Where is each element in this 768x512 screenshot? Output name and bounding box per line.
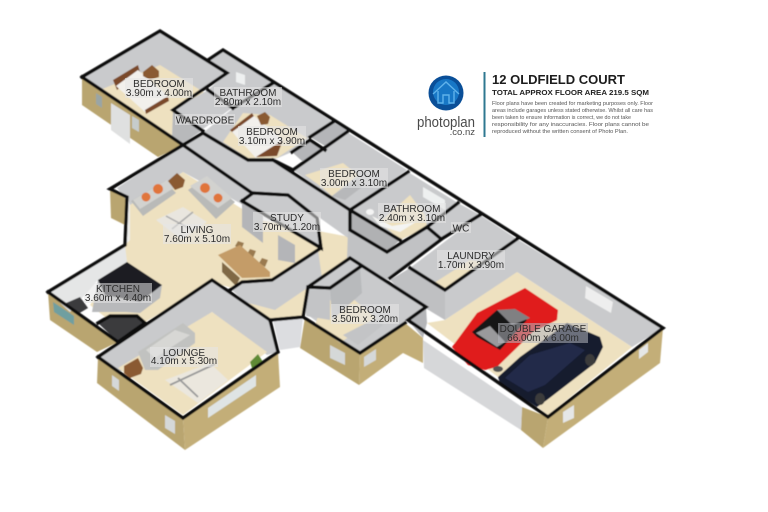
label: bathroom 2.80m x 2.10m: BATHROOM [219,88,277,99]
disclaimer text: reproduced without the written consent of Photo Plan. [492,129,628,135]
label: kitchen 3.60m x 4.40m: 3.60m x 4.40m [85,293,151,304]
study [242,193,320,263]
label: living 7.60m x 5.10m: 7.60m x 5.10m [164,234,230,245]
corridor walls [183,133,350,238]
icon: house in blue circle [428,76,464,110]
logo: photoplan [417,76,475,138]
label: bedroom 3.00m x 3.10m [320,168,388,189]
label: study 3.70m x 1.20m: 3.70m x 1.20m [254,222,320,233]
room: laundry and garage inner walls [390,215,518,320]
label: double garage 66.00m x 6.00m: 66.00m x 6.00m [507,333,579,344]
label: bedroom 3.00m x 3.10m: BEDROOM [328,169,380,180]
label: bathroom 2.80m x 2.10m: 2.80m x 2.10m [215,97,281,108]
label: bedroom 3.10m x 3.90m: BEDROOM [246,127,298,138]
disclaimer text: responsibility for any inaccuracies. Floor plans cannot be [492,122,649,128]
disclaimer text [492,101,653,135]
main floors [90,172,350,325]
label: bedroom 3.50m x 3.20m [331,304,399,325]
exterior brick walls [48,77,663,450]
label: WC: WC [453,224,469,234]
label: double garage 66.00m x 6.00m [498,323,588,344]
label: bedroom 3.90m x 4.00m: 3.90m x 4.00m [126,88,192,99]
label: bathroom 2.40m x 3.10m: 2.40m x 3.10m [379,213,445,224]
label: bathroom 2.40m x 3.10m [378,203,446,224]
logo domain: .co.nz [450,127,475,138]
label: bedroom 3.50m x 3.20m: 3.50m x 3.20m [332,314,398,325]
room: living walls [117,145,322,310]
icon: dark blue car [498,323,603,407]
label: living 7.60m x 5.10m [163,224,231,245]
label: bathroom 2.40m x 3.10m: BATHROOM [383,204,441,215]
label: double garage 66.00m x 6.00m: DOUBLE GARAGE [500,324,587,335]
dining table [218,241,270,286]
label: bathroom 2.80m x 2.10m [214,87,282,108]
disclaimer text: Floor plans have been created for marketing purposes only. Floor [492,101,653,107]
divider bar [484,72,486,137]
disclaimer text: been taken to ensure information is correct, we do not take [492,115,631,121]
doors and windows on exterior [96,93,648,434]
label: lounge 4.10m x 5.30m [150,347,218,367]
label: study 3.70m x 1.20m [253,212,321,233]
title: 12 OLDFIELD COURT [492,73,625,87]
lounge [98,280,278,418]
subtitle: total floor area: TOTAL APPROX FLOOR AREA 219.5 SQM [492,88,649,97]
label: kitchen 3.60m x 4.40m [84,283,152,304]
room: double garage [408,239,663,415]
label: kitchen 3.60m x 4.40m: KITCHEN [96,284,140,295]
label: living 7.60m x 5.10m: LIVING [181,225,214,236]
room: upper left bedroom [82,31,232,145]
label: laundry 1.70m x 3.90m [437,250,505,271]
label: study 3.70m x 1.20m: STUDY [270,213,304,224]
label: bedroom 3.10m x 3.90m: 3.10m x 3.90m [239,136,305,147]
label: bedroom 3.10m x 3.90m [238,126,306,147]
label: laundry 1.70m x 3.90m: LAUNDRY [447,251,495,262]
room: lower bedroom [305,258,426,353]
logo wordmark: photoplan [417,115,475,131]
label: bedroom 3.00m x 3.10m: 3.00m x 3.10m [321,178,387,189]
room: WC [427,203,480,238]
disclaimer text: areas include garages unless stated otherwise. Whilst all care has [492,108,653,114]
floor plan drawing [48,31,663,450]
icon: red car [452,288,558,372]
sofas and living furniture [131,173,235,240]
label: lounge 4.10m x 5.30m: LOUNGE [163,348,205,359]
label: wardrobe: WARDROBE [176,116,235,126]
room: upper right bedroom and bathroom [293,132,458,280]
room: middle bedroom [203,83,347,162]
black wall tops [48,31,663,418]
label: bedroom 3.90m x 4.00m [125,78,193,99]
label: laundry 1.70m x 3.90m: 1.70m x 3.90m [438,260,504,271]
label: lounge 4.10m x 5.30m: 4.10m x 5.30m [151,356,217,367]
kitchen [48,245,162,342]
room: upper bathroom [208,50,273,108]
label: bedroom 3.90m x 4.00m: BEDROOM [133,79,185,90]
label: bedroom 3.50m x 3.20m: BEDROOM [339,305,391,316]
